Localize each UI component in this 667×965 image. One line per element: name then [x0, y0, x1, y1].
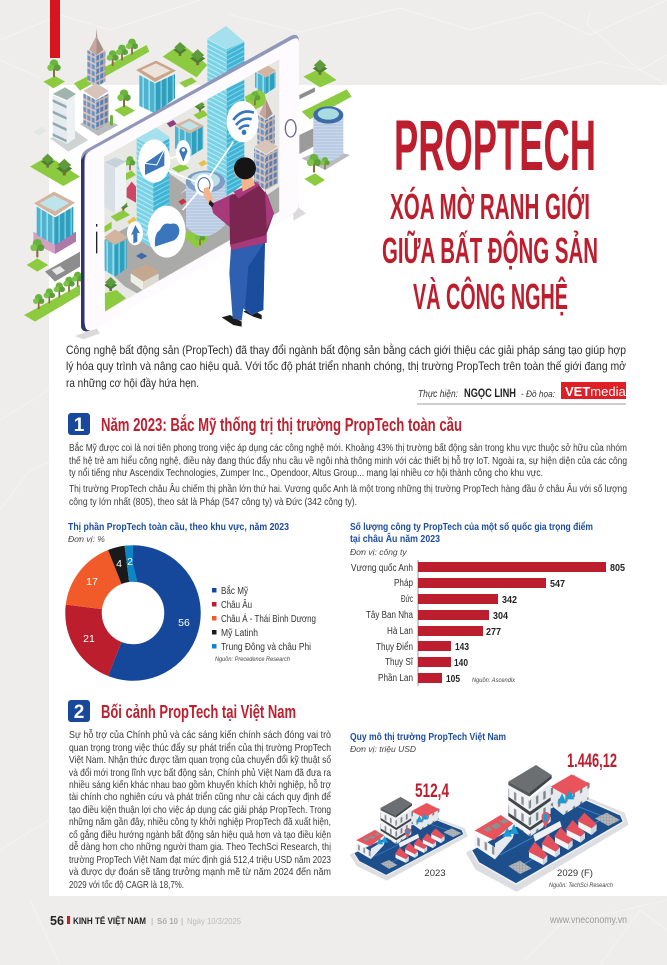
market size unit: Đơn vị: triệu USD: [350, 744, 416, 754]
section 2 body text: và được dự đoán sẽ tăng trưởng mạnh mẽ từ năm 2024 đến năm: [69, 866, 331, 878]
illustration: city 2023: [351, 797, 466, 879]
bar category labels: Hà Lan: [387, 626, 413, 637]
section 2 heading: Bối cảnh PropTech tại Việt Nam: [101, 702, 296, 722]
donut unit: Đơn vị: %: [68, 534, 105, 544]
bar chart unit: Đơn vị: công ty: [350, 547, 407, 557]
tablet screen city: [104, 64, 279, 312]
icon: upload arrow: [127, 221, 143, 245]
outside buildings and trees: [24, 26, 352, 322]
bar category labels: Tây Ban Nha: [366, 610, 413, 621]
intro paragraph: ra những cơ hội đầy hứa hẹn.: [66, 376, 199, 390]
donut legend: Bắc Mỹ: [221, 584, 248, 597]
section 2 body text: tài chính cho nghiên cứu và phát triển cũng như cải cách quy định để: [69, 791, 331, 803]
section 2 badge: [68, 700, 90, 723]
issue and date: |: [151, 916, 153, 926]
section 2 body text: quan trọng trong việc thúc đẩy sự phát triển của thị trường PropTech: [69, 742, 331, 754]
icon: wifi: [227, 101, 259, 142]
byline: - Đồ họa:: [521, 389, 555, 400]
bar chart title: Số lượng công ty PropTech của một số quốc gia trọng điểm: [350, 521, 593, 533]
bar category labels: [351, 562, 414, 684]
bar category labels: Thụy Điển: [376, 641, 413, 653]
bar chart source: Nguồn: Ascendix: [472, 675, 516, 684]
footer: Số 10: [157, 916, 178, 926]
label: 2029: 2029 (F): [557, 868, 593, 879]
donut chart panel: [68, 521, 316, 663]
bar values: 143: [455, 642, 469, 653]
bar category labels: Vương quốc Anh: [351, 562, 413, 574]
bar values: 547: [550, 579, 565, 590]
bar values: 277: [486, 627, 501, 638]
icon: mail: [138, 139, 170, 183]
section 1 badge: [68, 413, 90, 436]
donut legend: [212, 584, 316, 653]
donut value labels: 4: [116, 558, 122, 570]
section 1 body text: ty nổi tiếng như Ascendix Technologies, Zumper Inc., Opendoor, Altus Group... mang lại nhiều cơ hội thành công cho khu vực.: [69, 467, 543, 479]
icon: cloud: [148, 206, 186, 258]
bar chart axis: [418, 560, 419, 686]
tablet body: [81, 35, 299, 331]
page number: 56: [50, 914, 64, 928]
section 2 body text: 2029 với tốc độ CAGR là 18,7%.: [69, 879, 184, 891]
bar chart title: [350, 521, 593, 545]
footer: |: [181, 916, 183, 926]
market size panel: [350, 731, 627, 890]
donut value labels: 2: [127, 556, 133, 568]
tablet home button: [285, 120, 296, 137]
section 2 body text: Việt Nam. Nhận thức được tầm quan trọng của chuyển đổi kỹ thuật số: [69, 754, 331, 766]
section 1 heading: Năm 2023: Bắc Mỹ thống trị thị trường PropTech toàn cầu: [101, 414, 462, 435]
logo: VETmedia: VETmedia: [565, 384, 626, 399]
subtitle: [382, 185, 598, 317]
touch ring: [195, 174, 213, 196]
section 2 body text: và đổi mới trong lĩnh vực bất động sản, Chính phủ Việt Nam đã đưa ra: [69, 767, 331, 779]
donut legend: Trung Đông và châu Phi: [221, 642, 311, 653]
bar category labels: Pháp: [394, 578, 413, 589]
tablet speaker: [95, 224, 99, 253]
bar values: 304: [493, 611, 508, 622]
market size source: Nguồn: TechSci Research: [549, 880, 613, 889]
donut legend: Mỹ Latinh: [221, 628, 258, 639]
bar chart panel: [350, 521, 625, 686]
bar values: [446, 563, 625, 685]
bar chart title: tại châu Âu năm 2023: [350, 532, 440, 545]
bar category labels: Phần Lan: [378, 672, 413, 684]
illustration: city 2029: [468, 765, 627, 890]
section 2 badge: 2: [74, 702, 84, 723]
donut legend: Châu Á - Thái Bình Dương: [221, 612, 316, 625]
title: PROPTECH: [382, 107, 598, 317]
byline: NGỌC LINH: [464, 386, 516, 400]
bar values: 105: [446, 674, 460, 685]
donut legend: Châu Âu: [221, 598, 252, 611]
section 2 body text: [69, 728, 331, 891]
byline: Thực hiện:: [418, 389, 458, 400]
bar values: 342: [502, 595, 517, 606]
donut value labels: 21: [83, 633, 95, 645]
footer: [50, 914, 627, 928]
bar category labels: Thụy Sĩ: [385, 657, 414, 668]
section 1 badge: 1: [74, 415, 85, 436]
value: 512,4: 512,4: [415, 781, 449, 802]
section 2 body text: trường PropTech Việt Nam đạt mức định giá 512,4 triệu USD năm 2023: [69, 854, 331, 866]
bar category labels: Đức: [401, 594, 413, 605]
section 2 body text: những năm gần đây, nhiều công ty khởi nghiệp PropTech đã xuất hiện,: [69, 816, 331, 828]
donut chart: [84, 564, 182, 662]
person: [203, 157, 274, 327]
intro paragraph: [66, 342, 626, 390]
donut source: Nguồn: Precedence Research: [215, 654, 290, 663]
donut value labels: [83, 556, 190, 645]
publication name: KINH TẾ VIỆT NAM: [73, 915, 146, 926]
donut value labels: 56: [178, 617, 190, 629]
section 2 body text: dễ dàng hơn cho những người tham gia. Theo TechSci Research, thị: [69, 840, 331, 853]
value: 1.446,12: 1.446,12: [567, 751, 617, 772]
donut chart title: Thị phần PropTech toàn cầu, theo khu vực, năm 2023: [68, 521, 289, 533]
section 1 body text: công ty lớn nhất (805), theo sát là Pháp (547 công ty) và Đức (342 công ty).: [69, 496, 357, 508]
bars: [418, 562, 606, 683]
footer: Ngày 10/3/2025: [187, 916, 241, 926]
section 2 body text: Sự hỗ trợ của Chính phủ và các sáng kiến chính sách đóng vai trò: [69, 728, 331, 741]
donut value labels: 17: [86, 576, 98, 588]
bar values: 140: [454, 658, 468, 669]
section 2 body text: tạo điều kiện thuận lợi cho việc áp dụng các giải pháp PropTech. Trong: [69, 804, 331, 816]
label: 2023: 2023: [424, 868, 446, 879]
illustration: tablet smart city: [24, 26, 352, 339]
byline: [417, 382, 626, 405]
tablet shadow: [75, 207, 306, 339]
bar values: 805: [610, 563, 625, 574]
section 2 body text: nhiều sáng kiến khác nhau bao gồm khuyến khích khởi nghiệp, hỗ trợ: [69, 778, 331, 791]
section 2 body text: cố gắng điều hướng ngành bất động sản hiệu quả hơn và tạo điều kiện: [69, 828, 331, 841]
website: www.vneconomy.vn: [549, 915, 627, 926]
red tab: [50, 0, 60, 58]
screen connectors: [147, 142, 233, 235]
section 1 body text: [69, 441, 627, 508]
market size title: Quy mô thị trường PropTech Việt Nam: [350, 731, 506, 743]
icon: location pin: [176, 140, 191, 165]
